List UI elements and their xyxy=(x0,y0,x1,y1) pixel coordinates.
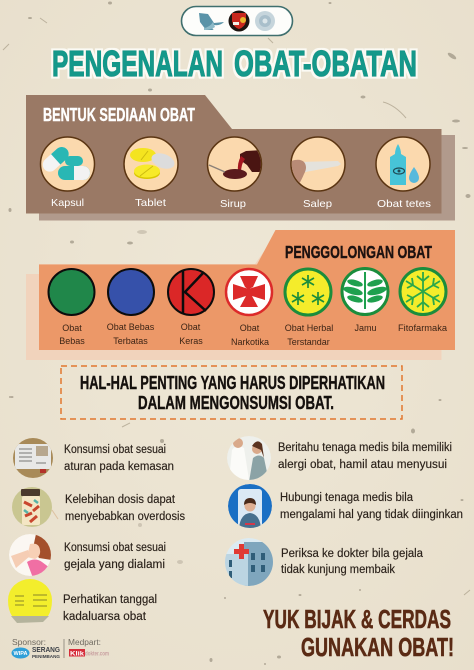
sponsor block: Sponsor: xyxy=(12,637,46,647)
sponsor block: Medpart: xyxy=(68,638,101,647)
tip: overdosis: menyebabkan overdosis xyxy=(65,511,185,523)
logo pill xyxy=(182,6,292,36)
tip: aturan pada kemasan xyxy=(13,438,174,478)
panel: penggolongan obat xyxy=(26,230,455,360)
sponsor block: WIPA xyxy=(14,651,28,657)
tip: alergi xyxy=(227,436,452,482)
tip: gejala xyxy=(9,534,166,578)
sponsor block: PENIMBANG xyxy=(32,654,60,659)
tip: aturan pada kemasan: Konsumsi obat sesuai xyxy=(64,444,166,456)
tip: aturan pada kemasan: aturan pada kemasan xyxy=(64,461,174,473)
sponsor block xyxy=(12,637,109,659)
label: obat keras: Keras xyxy=(179,336,203,346)
tip: alergi: alergi obat, hamil atau menyusui xyxy=(278,459,447,471)
item: kapsul xyxy=(40,137,94,209)
sponsor block: Klik xyxy=(70,650,84,658)
label: fitofarmaka: Fitofarmaka xyxy=(398,323,447,333)
label: kapsul: Kapsul xyxy=(51,197,84,209)
label: salep: Salep xyxy=(303,198,332,210)
tip: periksa ke dokter xyxy=(224,538,424,586)
label: obat bebas: Bebas xyxy=(59,336,85,346)
tip: overdosis xyxy=(12,487,185,527)
label: obat herbal terstandar: Terstandar xyxy=(287,337,330,347)
label: obat narkotika: Narkotika xyxy=(231,337,269,347)
item: tablet xyxy=(124,137,178,209)
panel: bentuk sediaan obat xyxy=(26,95,455,220)
label: obat bebas terbatas: Terbatas xyxy=(113,336,148,346)
badge: obat keras xyxy=(168,269,214,346)
tip: hubungi tenaga medis xyxy=(228,484,463,529)
tip: hubungi tenaga medis: Hubungi tenaga medis bila xyxy=(280,492,414,504)
badge: jamu xyxy=(342,268,388,333)
tip: periksa ke dokter: Periksa ke dokter bila gejala xyxy=(281,548,424,560)
tip: kadaluarsa: Perhatikan tanggal xyxy=(63,594,157,606)
tip: hubungi tenaga medis: mengalami hal yang tidak diinginkan xyxy=(280,509,463,521)
title xyxy=(52,43,417,84)
label: obat herbal terstandar: Obat Herbal xyxy=(285,323,333,333)
label: sirup: Sirup xyxy=(220,198,246,210)
badge: fitofarmaka xyxy=(398,268,447,333)
item: salep xyxy=(291,137,345,210)
sponsor block: SERANG xyxy=(32,647,61,654)
tip: alergi: Beritahu tenaga medis bila memiliki xyxy=(278,442,452,454)
badge: obat bebas xyxy=(48,269,94,346)
tip: kadaluarsa xyxy=(8,579,157,623)
tip: gejala: Konsumsi obat sesuai xyxy=(64,542,166,554)
badge: obat bebas terbatas xyxy=(107,269,155,346)
heading: bentuk sediaan obat: BENTUK SEDIAAN OBAT xyxy=(43,105,195,125)
label: obat narkotika: Obat xyxy=(240,323,259,333)
item: sirup xyxy=(208,137,262,210)
callout: hal-hal penting xyxy=(61,366,402,419)
icon: pale flower logo xyxy=(255,11,275,31)
sponsor block: dokter.com xyxy=(85,652,109,658)
tip: gejala: gejala yang dialami xyxy=(64,559,165,571)
label: jamu: Jamu xyxy=(354,323,377,333)
tip: kadaluarsa: kadaluarsa obat xyxy=(63,611,147,623)
tip: periksa ke dokter: tidak kunjung membaik xyxy=(281,564,395,576)
title: PENGENALAN xyxy=(52,43,223,84)
label: obat tetes: Obat tetes xyxy=(377,198,431,210)
label: tablet: Tablet xyxy=(135,197,166,209)
label: obat bebas: Obat xyxy=(62,323,82,333)
badge: obat narkotika xyxy=(226,269,272,347)
badge: obat herbal terstandar xyxy=(285,269,333,347)
label: obat keras: Obat xyxy=(181,322,200,332)
icon: wave logo xyxy=(199,13,224,30)
icon: red shield logo xyxy=(228,10,250,32)
item: obat tetes xyxy=(376,137,431,210)
callout text: DALAM MENGONSUMSI OBAT. xyxy=(138,393,334,413)
tip: overdosis: Kelebihan dosis dapat xyxy=(65,494,176,506)
label: obat bebas terbatas: Obat Bebas xyxy=(107,322,154,332)
